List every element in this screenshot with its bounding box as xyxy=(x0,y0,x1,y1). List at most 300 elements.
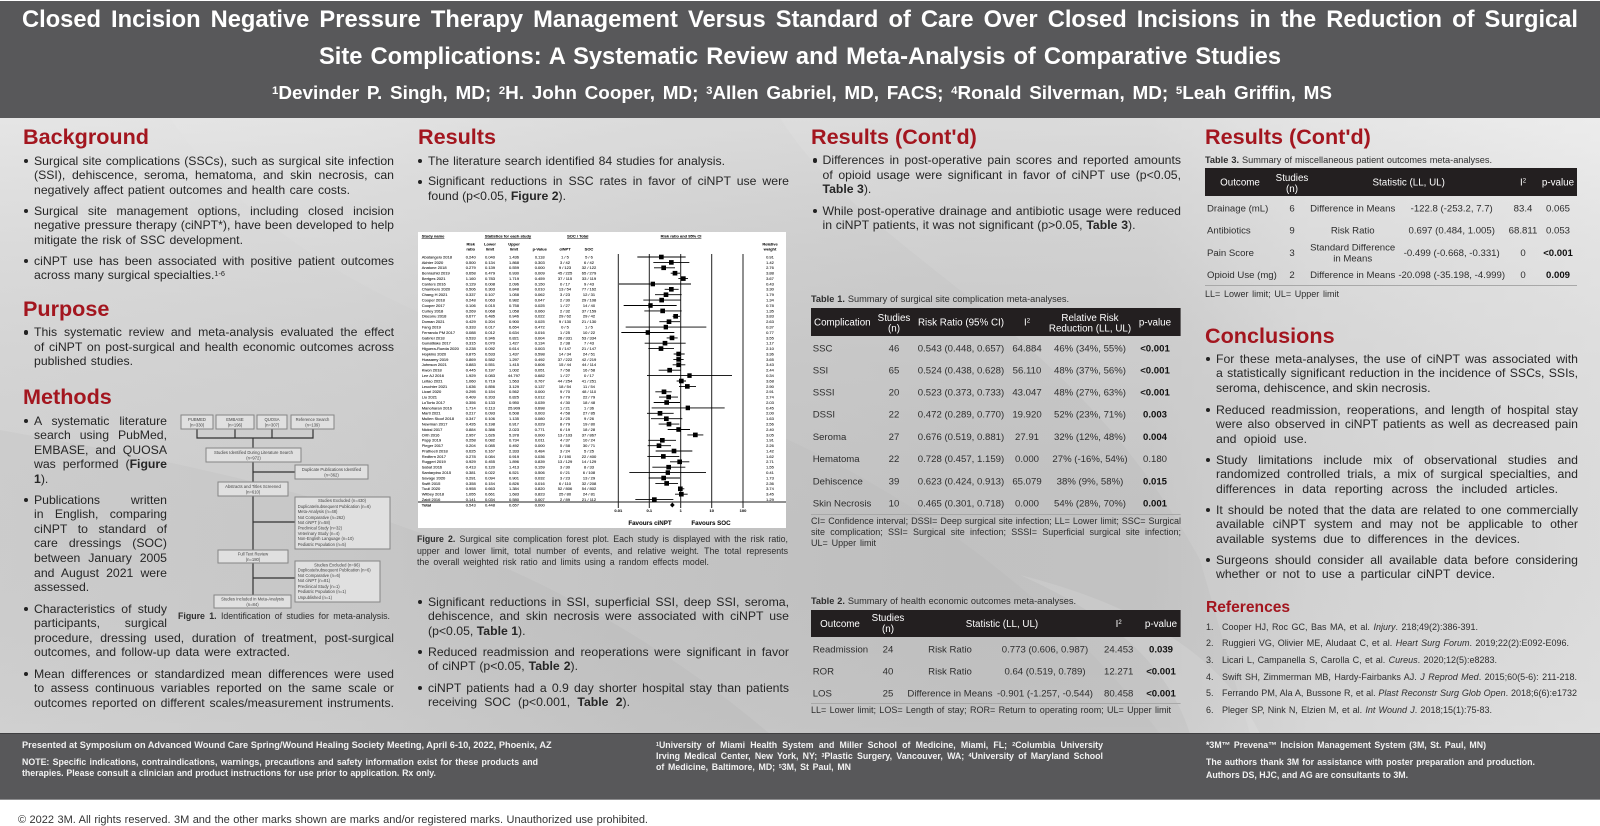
forest plot study table: Orth 2016 xyxy=(422,432,440,437)
chart: forest plot figure 2 xyxy=(418,232,786,528)
table 2 grid: (n) xyxy=(882,624,894,635)
forest plot study table: 0.016 xyxy=(535,330,545,335)
text block: conclusions bullet 3: randomized controlled trials, a mix of surgical specialties, and xyxy=(1216,467,1578,481)
forest plot study table: Gabriel 2018 xyxy=(422,335,445,340)
forest plot study table: 29 / 62 xyxy=(559,314,572,319)
forest plot study table: 2.76 xyxy=(766,265,775,270)
text block: conclusions bullet 1: a statistically significant reduction in the incidence of SSCs, SSIs, xyxy=(1216,366,1578,380)
table 1 grid: 0.523 (0.373, 0.733) xyxy=(918,387,1004,398)
forest plot study table: 0.37 xyxy=(766,324,775,330)
forest plot study table: 1.160 xyxy=(466,276,476,281)
forest plot study table: 0.022 xyxy=(485,470,496,475)
forest plot study table: 0.869 xyxy=(466,357,476,362)
table 1 grid: 0.465 (0.301, 0.718) xyxy=(918,499,1004,510)
panel: table 2 xyxy=(811,596,1181,715)
text block: methods bullet 2 xyxy=(25,493,167,595)
forest plot study table: 0.606 xyxy=(535,362,545,367)
text block: results cont bullet 2: in ciNPT patients, it was not significant (p>0.05, Table 3). xyxy=(822,218,1136,232)
text block: results cont bullet 1: of opioid usage were significant in favor of ciNPT use (p<0.05, xyxy=(822,168,1181,182)
forest plot study table: 0.240 xyxy=(466,254,476,259)
text block: conclusions bullet 3: Study limitations include mix of observational studies and xyxy=(1216,453,1578,467)
forest plot study table: Diaconu 2018 xyxy=(422,314,447,319)
forest plot study table: 0.982 xyxy=(509,298,520,302)
flow diagram: figure 1: (n=330) xyxy=(190,422,205,428)
forest plot study table: Anatone 2018 xyxy=(422,265,447,270)
forest plot study table: 0.448 xyxy=(485,502,496,507)
forest plot study table: Nicksl 2017 xyxy=(422,427,443,432)
text block: methods bullet 2: in English, comparing xyxy=(34,507,167,521)
forest plot study table: 1.636 xyxy=(466,384,476,389)
text block: methods bullet 1: was performed (Figure xyxy=(34,457,167,471)
forest plot study table: 29 / 108 xyxy=(582,298,597,302)
forest plot study table: Mullen Stoof 2018 xyxy=(422,416,455,421)
caption: figure 2: Figure 2. Surgical site complication forest plot. Each study is displayed with the risk ratio, xyxy=(417,534,788,544)
text block: methods bullet 2: and August 2021 were xyxy=(34,566,167,580)
forest plot study table: 0.479 xyxy=(485,271,496,276)
forest plot study table: 0.839 xyxy=(535,459,545,464)
forest plot study table: 52 / 806 xyxy=(558,486,573,491)
panel: table 3 xyxy=(1205,155,1577,299)
forest plot study table: Johnson 2021 xyxy=(422,362,448,367)
forest plot study table: 0.000 xyxy=(535,502,545,507)
table 1 grid: 46% (34%, 55%) xyxy=(1054,344,1126,355)
forest plot study table: 7 / 43 xyxy=(584,341,595,346)
forest plot study table: 1.002 xyxy=(509,368,520,373)
forest plot study table: 2 / 38 xyxy=(560,341,571,346)
forest plot study table: 1.436 xyxy=(509,254,520,259)
table 3 grid: Difference in Means xyxy=(1310,204,1395,215)
forest plot study table: 0.506 xyxy=(466,287,476,292)
forest plot study table: 2.44 xyxy=(766,368,775,373)
forest plot study table: 0.848 xyxy=(509,287,520,292)
text block: methods bullet 1: A systematic literature xyxy=(34,414,167,428)
table 2 grid: Risk Ratio xyxy=(928,644,972,655)
forest plot study table: 1 / 36 xyxy=(584,405,595,410)
forest plot study table: 16 / 58 xyxy=(583,368,596,373)
footer: acknowledgements: Authors DS, HJC, and AG are consultants to 3M. xyxy=(1206,770,1408,780)
forest plot study table: 0.000 xyxy=(535,443,545,448)
flow diagram: figure 1: Preclinical Study (n=1) xyxy=(298,584,340,589)
forest plot study table: 0.003 xyxy=(535,411,545,416)
forest plot study table: 8 / 33 xyxy=(584,465,595,470)
table 2 footnote: LL= Lower limit; LOS= Length of stay; ROR= Return to operating room; UL= Upper limit xyxy=(811,705,1171,715)
table 2 grid: 0.039 xyxy=(1149,644,1173,655)
forest plot axes and markers: 10 xyxy=(709,508,715,513)
text block: results cont bullet 1: Table 3). xyxy=(822,182,871,196)
forest plot study table: Liu 2021 xyxy=(422,394,438,400)
forest plot study table: 0.204 xyxy=(485,319,496,324)
forest plot study table: 0.060 xyxy=(535,308,545,313)
forest plot study table: 1.135 xyxy=(509,416,520,421)
forest plot study table: 0.051 xyxy=(535,368,545,373)
background swoosh pattern xyxy=(0,118,1600,733)
forest plot study table: 0.015 xyxy=(485,303,496,308)
forest plot study table: 3.05 xyxy=(766,432,775,437)
forest plot study table: 2 / 30 xyxy=(560,298,571,302)
forest plot study table: 0.661 xyxy=(485,492,496,497)
forest plot study table: 0 / 17 xyxy=(584,373,595,378)
forest plot study table: 30 / 71 xyxy=(583,443,596,448)
forest plot axes and markers: 0.1 xyxy=(647,508,653,513)
table 2 grid: <0.001 xyxy=(1146,666,1176,677)
forest plot study table: 3.43 xyxy=(766,362,775,367)
flow diagram: figure 1: Non-English Language (n=10) xyxy=(298,536,354,541)
forest plot study table: 0.358 xyxy=(466,481,476,486)
forest plot study table: 0.356 xyxy=(466,400,476,405)
forest plot study table: 0.472 xyxy=(535,324,545,330)
forest plot column headers: weight xyxy=(763,247,777,252)
forest plot favours labels xyxy=(628,520,731,527)
forest plot study table: 2.333 xyxy=(509,448,520,453)
forest plot study table: 77 / 162 xyxy=(582,287,597,292)
table 1 grid: <0.001 xyxy=(1140,387,1170,398)
forest plot study table: 0.010 xyxy=(535,287,545,292)
forest plot study table: 37 / 867 xyxy=(582,432,597,437)
table 1 grid: Studies xyxy=(878,313,910,324)
forest plot study table: 0.598 xyxy=(535,351,545,356)
forest plot study table: 1.42 xyxy=(766,260,775,265)
forest plot study table: 21 / 112 xyxy=(582,497,597,502)
text block: background bullet 3: across many surgical specialties.1-6 xyxy=(34,268,225,282)
table 2 grid: 24 xyxy=(883,644,894,655)
forest plot study table: 0.295 xyxy=(466,389,476,394)
forest plot study table: 2.40 xyxy=(766,427,775,432)
forest plot study table: 0.269 xyxy=(466,308,476,313)
text block: results bullet 1: The literature search identified 84 studies for analysis. xyxy=(428,154,725,168)
forest plot study table: 0.657 xyxy=(509,502,520,507)
flow diagram: figure 1: (n=84) xyxy=(246,602,259,607)
forest plot study table: 1 / 21 xyxy=(560,405,571,410)
text block: methods bullet 4: to assess continuous variables reported on the same scale or xyxy=(34,681,394,695)
heading: Results: Results xyxy=(418,124,496,149)
flow diagram: figure 1: (n=362) xyxy=(324,472,339,478)
table 1 grid: 0.015 xyxy=(1143,476,1168,487)
flow diagram: figure 1: (n=610) xyxy=(246,490,261,494)
table 2 grid: -0.901 (-1.257, -0.544) xyxy=(997,689,1093,700)
text block: methods bullet 1 xyxy=(25,414,167,487)
flow diagram: figure 1: (n=972) xyxy=(246,456,261,460)
forest plot study table: 1.060 xyxy=(466,378,476,383)
forest plot study table: 1.714 xyxy=(466,405,476,410)
forest plot study table: 32 / 208 xyxy=(582,481,597,486)
forest plot study table: Swift 2015 xyxy=(422,481,441,486)
table 3 grid: 0 xyxy=(1520,270,1526,281)
text block: conclusions bullet 4: It should be noted that the data are related to one commercially xyxy=(1216,503,1578,517)
forest plot study table: 0.43 xyxy=(766,281,775,286)
forest plot study table: 1.427 xyxy=(509,341,520,346)
forest plot study table: 3 / 190 xyxy=(559,454,572,459)
forest plot study table: 1.91 xyxy=(766,438,775,443)
forest plot study table: 0.34 xyxy=(766,373,775,378)
forest plot study table: Higuera-Rueda 2020 xyxy=(422,346,460,351)
forest plot study table: 0.682 xyxy=(535,373,545,378)
forest plot study table: 14 / 34 xyxy=(559,351,572,356)
caption: figure 2 xyxy=(417,534,788,567)
forest plot study table: Gunatilake 2017 xyxy=(422,341,452,346)
forest plot study table: Manoharan 2016 xyxy=(422,405,453,410)
forest plot study table: 1.626 xyxy=(485,432,496,437)
forest plot study table: 0.107 xyxy=(485,292,496,297)
forest plot study table: 0.258 xyxy=(466,438,476,443)
forest plot study table: 24 / 51 xyxy=(583,351,596,356)
forest plot study table: Papp 2019 xyxy=(422,438,442,443)
forest plot study table: 0.485 xyxy=(485,314,496,319)
flow diagram: figure 1: Full Text Review xyxy=(238,552,269,556)
forest plot study table: 3 / 23 xyxy=(560,475,571,480)
forest plot column headers: Relative xyxy=(762,241,778,246)
forest plot study table: 1.63 xyxy=(766,416,775,421)
table 3 grid: Drainage (mL) xyxy=(1207,204,1268,215)
table 1 grid: 0.472 (0.289, 0.770) xyxy=(918,410,1004,421)
forest plot study table: 0.009 xyxy=(535,271,545,276)
forest plot study table: 1.058 xyxy=(509,308,520,313)
table 2 grid: 80.458 xyxy=(1104,689,1133,700)
flow diagram: figure 1: (n=196) xyxy=(228,422,243,428)
text block: methods bullet 2: care dressings (SOC) xyxy=(34,536,167,550)
forest plot study table: 0.919 xyxy=(509,454,520,459)
forest plot study table: 0.663 xyxy=(485,486,496,491)
forest plot study table: 0.337 xyxy=(466,292,476,297)
references list: Licari L, Campanella S, Carolla C, et al. Cureus. 2020;12(5):e8283. xyxy=(1222,655,1497,665)
forest plot study table: 3 / 42 xyxy=(560,260,571,265)
table 1 grid: SSI xyxy=(813,365,828,376)
forest plot study table: 24 / 81 xyxy=(583,492,596,497)
table 1 grid: 0.004 xyxy=(1143,432,1168,443)
forest plot column headers: Lower xyxy=(484,241,496,246)
text block: results bullet 3 xyxy=(419,595,789,638)
forest plot study table: 0.901 xyxy=(509,475,520,480)
table 2 grid: 2 xyxy=(1118,620,1122,626)
text block: purpose bullet xyxy=(25,325,394,369)
forest plot study table: Leitao 2021 xyxy=(422,378,443,383)
forest plot study table: 0.278 xyxy=(466,454,476,459)
forest plot study table: 0.083 xyxy=(485,373,496,378)
forest plot study table: 0.070 xyxy=(485,341,496,346)
table 1 footnote: CI= Confidence interval; DSSI= Deep surgical site infection; LL= Lower limit; SSC= Surgical xyxy=(811,516,1181,526)
forest plot study table: 21 / 130 xyxy=(582,319,597,324)
flow diagram: figure 1: Meta-Analysis (n=48) xyxy=(298,509,338,514)
forest plot study table: 0.203 xyxy=(485,394,496,400)
forest plot study table: 0.085 xyxy=(485,443,496,448)
forest plot study table: 3.67 xyxy=(766,276,775,281)
forest plot study table: 6.521 xyxy=(509,470,520,475)
authors: 1Devinder P. Singh, MD; 2H. John Cooper, MD; 3Allen Gabriel, MD, FACS; 4Ronald Silverman, MD; 5Leah Griffin, MS xyxy=(272,83,1332,104)
flow diagram: figure 1: Not Comparative (n=262) xyxy=(298,515,345,520)
flow diagram: figure 1: Pediatric Population (n=5) xyxy=(298,542,347,547)
forest plot study table: Benrashid 2019 xyxy=(422,271,450,276)
table 2 grid: <0.001 xyxy=(1146,689,1176,700)
table 1 grid: 22 xyxy=(889,454,899,465)
table 2 grid: Outcome xyxy=(820,619,860,630)
forest plot study table: 1.297 xyxy=(509,357,520,362)
forest plot axes and markers: 1 xyxy=(680,508,683,513)
forest plot study table: 0.204 xyxy=(466,443,476,448)
forest plot study table: 1.896 xyxy=(509,459,520,464)
forest plot study table: 0.381 xyxy=(466,470,476,475)
forest plot study table: 18 / 54 xyxy=(559,384,572,389)
table 1 grid: SSSI xyxy=(813,387,835,398)
caption: figure 2: upper and lower limit, total number of events, and relative weight. The total represents xyxy=(417,546,788,556)
forest plot study table: 0.094 xyxy=(485,475,496,480)
flow diagram: figure 1: Duplicate Publications Identified xyxy=(302,467,362,472)
text block: background bullet 1: negatively affect patient outcomes and health care costs. xyxy=(34,183,350,197)
forest plot study table: 0.016 xyxy=(535,481,545,486)
text block: conclusions bullet 3: differences in data reporting across the included articles. xyxy=(1216,482,1558,496)
table 1 grid: Hematoma xyxy=(813,454,860,465)
forest plot study table: 6 / 19 xyxy=(560,427,571,432)
text block: results bullet 5 xyxy=(419,681,789,710)
table 3 grid: Difference in Means xyxy=(1310,270,1395,281)
footer: presentation note xyxy=(22,740,552,778)
text block: methods bullet 1: EMBASE, and QUOSA xyxy=(34,443,167,457)
forest plot study table: 1.55 xyxy=(766,465,775,470)
references list: Swift SH, Zimmerman MB, Hardy-Fairbanks AJ. J Reprod Med. 2015;60(5-6): 211-218. xyxy=(1222,672,1577,682)
table 3 grid: Antibiotics xyxy=(1207,226,1251,237)
forest plot study table: 1.73 xyxy=(766,475,775,480)
forest plot study table: 5.378 xyxy=(509,432,520,437)
copyright line: © 2022 3M. All rights reserved. 3M and the other marks shown are marks and/or registered marks. Unauthorized use prohibited. xyxy=(18,814,648,826)
forest plot study table: 0.063 xyxy=(485,298,496,302)
forest plot study table: 0.625 xyxy=(466,448,476,453)
table 3 grid: p-value xyxy=(1542,177,1575,188)
forest plot study table: 0.508 xyxy=(509,411,520,416)
forest plot study table: 0.040 xyxy=(485,254,496,259)
forest plot study table: 3 / 23 xyxy=(560,292,571,297)
forest plot study table: 22 / 79 xyxy=(583,394,596,400)
forest plot study table: Curley 2018 xyxy=(422,308,444,313)
forest plot study table: Cooper 2017 xyxy=(422,303,446,308)
forest plot column headers: Upper xyxy=(508,241,520,246)
table 3 grid: 68.811 xyxy=(1509,226,1537,237)
references list: Ruggieri VG, Olivier ME, Aludaat C, et al. Heart Surg Forum. 2019;22(2):E092-E096. xyxy=(1222,638,1569,648)
table 3 grid: 0 xyxy=(1520,248,1526,259)
flow diagram: figure 1: Abstracts and Titles Screened xyxy=(225,484,281,489)
forest plot study table: 6 / 42 xyxy=(584,260,595,265)
text block: methods bullet 4: Mean differences or standardized mean differences were used xyxy=(34,667,394,681)
forest plot study table: 1.055 xyxy=(466,492,476,497)
text block: background bullet 3: ciNPT use has been associated with positive patient outcomes xyxy=(34,254,394,268)
table 1 grid: 48% (27%, 63%) xyxy=(1054,387,1126,398)
flow diagram: figure 1: PUBMED xyxy=(188,417,206,422)
table 3 grid: Outcome xyxy=(1220,177,1260,188)
table 3 grid: Opioid Use (mg) xyxy=(1207,270,1277,281)
forest plot column headers: ciNPT xyxy=(559,247,571,252)
forest plot study table: Ruggeri 2019 xyxy=(422,459,446,464)
forest plot column headers: SOC xyxy=(585,247,593,252)
footer: acknowledgements xyxy=(1206,740,1535,780)
forest plot study table: LoTorto 2017 xyxy=(422,400,446,405)
text block: methods bullet 3: participants, surgical xyxy=(34,616,167,630)
forest plot study table: 12 / 31 xyxy=(583,292,596,297)
forest plot study table: 0.141 xyxy=(466,497,476,502)
forest plot study table: 1 / 27 xyxy=(560,373,571,378)
table 3 title: Table 3. Summary of miscellaneous patient outcomes meta-analyses. xyxy=(1205,155,1492,165)
forest plot study table: 0.783 xyxy=(485,276,496,281)
forest plot study table: 0.080 xyxy=(535,416,545,421)
forest plot study table: 2.26 xyxy=(766,443,775,448)
flow diagram: figure 1: Studies Included in Meta-Analysis xyxy=(221,596,284,602)
forest plot study table: 0.062 xyxy=(535,292,545,297)
text block: methods bullet 3: outcomes, and follow-up data were extracted. xyxy=(34,645,290,659)
forest plot study table: Abatangelo 2018 xyxy=(422,254,453,259)
forest plot study table: 1.34 xyxy=(766,298,775,302)
footer: affiliations: Irving Medical Center, New York, NY; 3Plastic Surgery, Vancouver, WA; 4University of Maryland School xyxy=(656,751,1103,761)
table 1 grid: 0.180 xyxy=(1143,454,1167,465)
forest plot study table: 6.654 xyxy=(509,324,520,330)
forest plot study table: 1.868 xyxy=(509,260,520,265)
forest plot study table: 14 / 129 xyxy=(582,459,597,464)
forest plot study table: 15 / 44 xyxy=(559,362,572,367)
text block: methods bullet 4: outcomes reported on different scales/measurement instruments. xyxy=(34,696,394,710)
table 1 grid: 32% (12%, 48%) xyxy=(1054,432,1126,443)
forest plot study table: 9 / 79 xyxy=(560,394,571,400)
forest plot study table: 0.930 xyxy=(509,271,520,276)
forest plot study table: 2.10 xyxy=(766,346,775,351)
text block: methods bullet 2: ciNPT to standard of xyxy=(34,522,167,536)
table 3 grid: 2 xyxy=(1523,178,1527,184)
forest plot study table: 0.459 xyxy=(535,276,545,281)
text block: background bullet 1: (SSI), dehiscence, seroma, hematoma, and skin necrosis, can xyxy=(34,168,394,182)
forest plot study table: 3.88 xyxy=(766,271,775,276)
forest plot study table: 0.856 xyxy=(485,384,496,389)
forest plot study table: 3 / 30 xyxy=(560,465,571,470)
forest plot study table: 0.088 xyxy=(466,330,476,335)
forest plot study table: 3.129 xyxy=(509,384,520,389)
forest plot study table: 0.41 xyxy=(766,470,775,475)
forest plot study table: Akhter 2020 xyxy=(422,260,444,265)
forest plot column headers: SOC / Total xyxy=(567,233,588,238)
text block: methods bullet 2: assessed. xyxy=(34,580,89,594)
forest plot study table: Leuchter 2021 xyxy=(422,384,448,389)
forest plot study table xyxy=(422,254,775,507)
table 2 grid: p-value xyxy=(1145,619,1178,630)
table 1 title: Table 1. Summary of surgical site complication meta-analyses. xyxy=(811,294,1069,304)
forest plot study table: 2.74 xyxy=(766,394,775,400)
forest plot study table: Zaidi 2016 xyxy=(422,497,441,502)
table 2 title: Table 2. Summary of health economic outcomes meta-analyses. xyxy=(811,596,1076,606)
forest plot favours labels: Favours ciNPT xyxy=(628,520,672,527)
table 1 footnote: site complication; SSI= Surgical site infection; SSSI= Superficial surgical site infection; xyxy=(811,527,1181,537)
forest plot study table: 1.29 xyxy=(766,497,775,502)
text block: results cont bullet 1 xyxy=(814,153,1181,197)
flow diagram: figure 1: (n=307) xyxy=(265,422,280,428)
forest plot study table: Redfern 2017 xyxy=(422,454,447,459)
forest plot study table: 0.032 xyxy=(535,475,545,480)
flow diagram: figure 1: Duplicate/subsequent Publication (n=6) xyxy=(298,504,371,509)
forest plot study table: 0.767 xyxy=(535,378,545,383)
forest plot study table: 4 / 30 xyxy=(560,400,571,405)
forest plot study table: 5 / 6 xyxy=(585,254,594,259)
forest plot study table: 3.74 xyxy=(766,486,775,491)
text block: purpose bullet: published studies. xyxy=(34,354,133,368)
table 1 grid: SSC xyxy=(813,344,832,355)
forest plot study table: 2.023 xyxy=(509,427,520,432)
forest plot study table: 0.068 xyxy=(485,308,496,313)
forest plot study table: 3.68 xyxy=(766,378,775,383)
forest plot study table: 2.91 xyxy=(766,389,775,394)
flow diagram: figure 1: Not Comparative (n=6) xyxy=(298,573,341,578)
table 3 grid: 6 xyxy=(1289,204,1295,215)
forest plot study table: 5 / 25 xyxy=(584,448,595,453)
table 1 grid: Complication xyxy=(814,317,871,328)
forest plot study table: 0.634 xyxy=(509,330,520,335)
text block: background bullet 2 xyxy=(25,204,394,247)
forest plot study table: 0.000 xyxy=(535,265,545,270)
forest plot study table: 0.118 xyxy=(535,254,545,259)
forest plot study table: 2 / 32 xyxy=(560,308,571,313)
table 3 grid: -122.8 (-253.2, 7.7) xyxy=(1411,204,1493,215)
table 3 grid: in Means xyxy=(1333,253,1372,264)
